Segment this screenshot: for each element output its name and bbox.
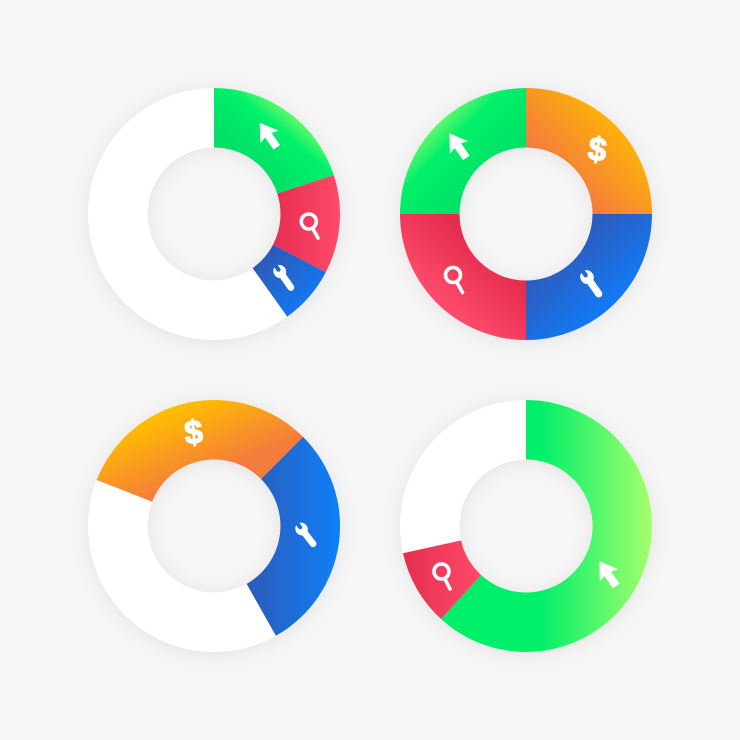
- icon: arrow: [441, 128, 474, 163]
- red segment: [400, 214, 526, 340]
- icon: magnifier: [446, 268, 462, 292]
- icon: dollar: $: [586, 129, 609, 169]
- icon: arrow: [592, 556, 624, 591]
- green segment: [441, 400, 652, 652]
- icon: wrench: [578, 268, 606, 301]
- green segment: [400, 88, 526, 214]
- red segment: [273, 175, 340, 272]
- donut chart: two segments bottom left: [88, 400, 340, 652]
- orange segment: [97, 400, 303, 502]
- green segment: [214, 88, 334, 194]
- icon: arrow: [252, 118, 285, 153]
- donut chart: three segments top left: [88, 88, 340, 340]
- orange segment: [526, 88, 652, 214]
- blue segment: [247, 437, 340, 636]
- donut chart: four quarters top right: [400, 88, 652, 340]
- icon: magnifier: [434, 564, 450, 589]
- red segment: [403, 540, 481, 619]
- white base ring: [400, 88, 652, 340]
- white base ring: [400, 400, 652, 652]
- blue segment: [526, 214, 652, 340]
- icon: magnifier: [301, 214, 318, 238]
- donut chart: two segments bottom right: [400, 400, 652, 652]
- icon: wrench: [293, 520, 320, 550]
- icon: dollar: $: [183, 413, 204, 451]
- white base ring: [88, 88, 340, 340]
- blue segment: [253, 245, 326, 317]
- icon: wrench: [271, 263, 298, 294]
- white base ring: [88, 400, 340, 652]
